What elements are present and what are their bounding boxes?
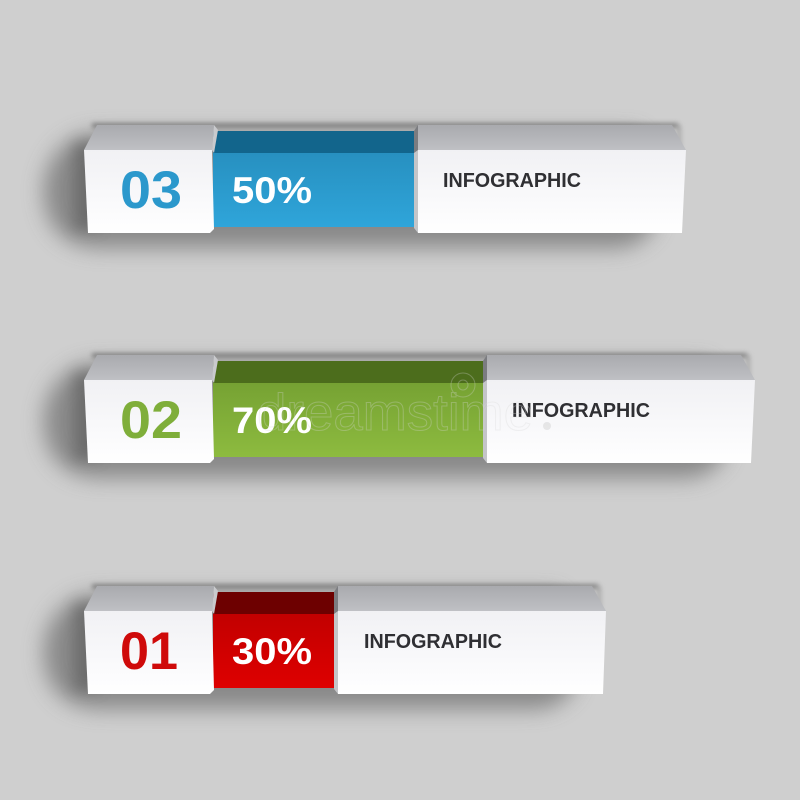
row 03 percent: 50% (232, 170, 312, 211)
row 01 percent: 30% (232, 631, 312, 672)
row 02 number block (84, 355, 218, 463)
row 01 label: INFOGRAPHIC (364, 631, 502, 653)
row 03 label: INFOGRAPHIC (443, 170, 581, 192)
row 02 number: 02 (120, 391, 182, 450)
row 02 label block (483, 355, 755, 463)
row 02 coloured bar (213, 361, 483, 457)
row 01 drop shadow (44, 584, 601, 709)
row 03: blue 50% bar (44, 123, 686, 248)
row 01 number block (84, 586, 218, 694)
watermark: dreamstime (257, 384, 533, 442)
row 02 label: INFOGRAPHIC (512, 400, 650, 422)
row 01 coloured bar (213, 592, 334, 688)
row 03 coloured bar (213, 131, 414, 227)
row 02 percent: 70% (232, 400, 312, 441)
row 03 label block (414, 125, 686, 233)
row 01 number: 01 (120, 622, 178, 681)
row 01: red 30% bar (44, 584, 606, 709)
row 02 drop shadow (44, 353, 750, 478)
row 01 label block (334, 586, 606, 694)
row 03 number: 03 (120, 161, 182, 220)
row 03 drop shadow (44, 123, 681, 248)
row 03 number block (84, 125, 218, 233)
row 02: green 70% bar (44, 353, 755, 478)
